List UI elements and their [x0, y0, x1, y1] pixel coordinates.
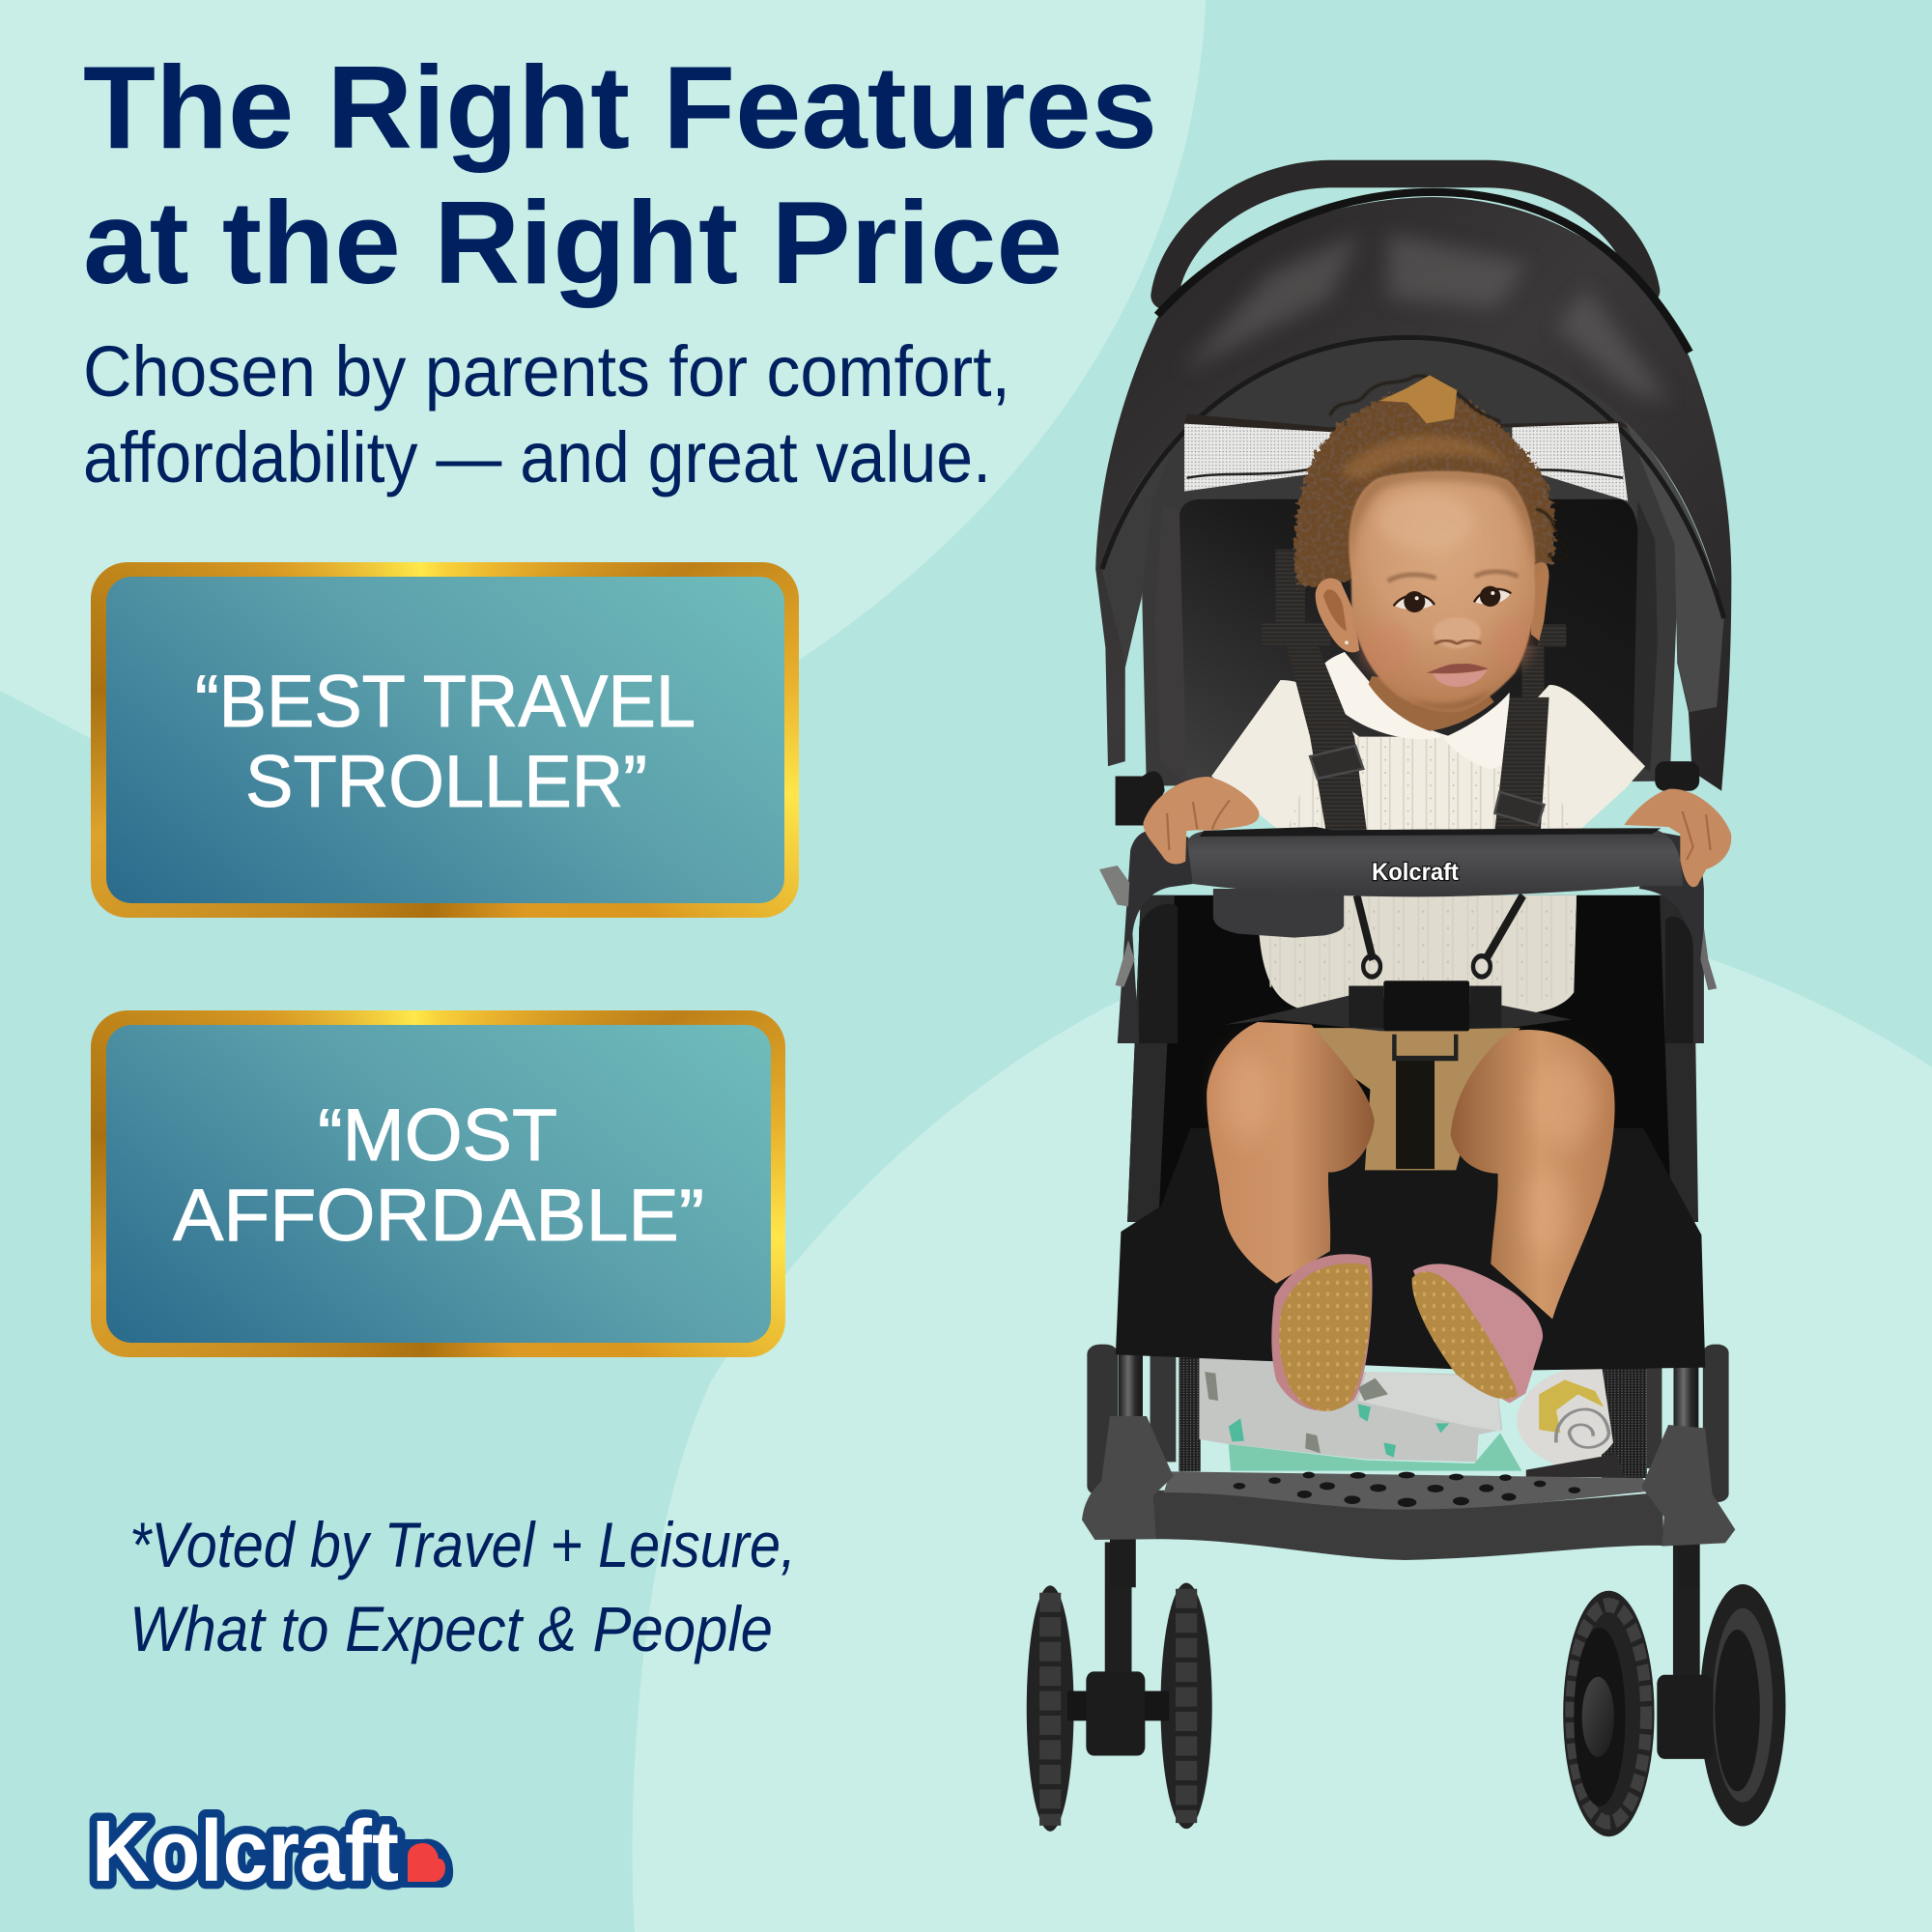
badge text: “MOST [318, 1094, 557, 1177]
frame arms [1118, 831, 1704, 1043]
inner ear left [1323, 589, 1347, 631]
earring [1345, 640, 1349, 644]
hair bow [1379, 375, 1457, 423]
right hinge [1655, 761, 1699, 791]
left shoe [1271, 1254, 1373, 1411]
footrest left cone [1082, 1416, 1174, 1540]
footrest deck [1164, 1471, 1653, 1510]
collar [1316, 652, 1510, 769]
footnote: What to Expect & People [129, 1593, 773, 1664]
eye left [1394, 591, 1435, 612]
background blob: bottom right [633, 928, 1932, 1932]
forehead highlight [1378, 493, 1475, 551]
basket mesh left [1179, 1352, 1201, 1471]
eye right [1474, 586, 1511, 607]
shorts [1285, 1028, 1520, 1170]
basket floor [1526, 1454, 1625, 1477]
shirt knit texture [1286, 737, 1574, 836]
left post [1119, 1354, 1143, 1422]
waist belt and buckle [1226, 980, 1572, 1059]
badge text [195, 661, 696, 823]
handlebar [1165, 174, 1646, 296]
leg highlights [1220, 1051, 1595, 1258]
upper harness straps [1262, 550, 1566, 699]
badge text: AFFORDABLE” [173, 1175, 704, 1257]
ear right [1531, 562, 1549, 640]
footrest right cone [1641, 1425, 1735, 1547]
side clip right [1700, 927, 1717, 990]
hand right [1624, 789, 1731, 887]
front right wheel pair [1563, 1542, 1785, 1836]
mouth [1427, 664, 1489, 687]
award box: most affordable [91, 1010, 785, 1357]
mesh creases [1187, 469, 1623, 478]
green blanket [1229, 1433, 1521, 1471]
hair [1294, 386, 1554, 586]
folded grey blanket [1199, 1354, 1502, 1462]
shirt [1211, 680, 1645, 836]
torso knit texture [1258, 895, 1577, 1015]
Kolcraft logo: Kolcraft [92, 1804, 399, 1900]
badge text: STROLLER” [245, 741, 647, 823]
seat side fabric right [1631, 500, 1658, 771]
canopy and seat back [1095, 174, 1731, 836]
basket frame [1151, 1350, 1662, 1468]
title: at the Right Price [83, 177, 1063, 308]
rear wheels [1087, 1345, 1729, 1502]
footrest front bar [1151, 1491, 1664, 1560]
rolled blanket [1517, 1365, 1613, 1466]
seat back pad [1179, 499, 1637, 779]
award box: best travel stroller [91, 562, 799, 918]
badge panel [106, 1025, 771, 1343]
baby head [1294, 375, 1567, 731]
chest clips [1357, 895, 1523, 977]
hairline shading [1347, 469, 1537, 573]
badge text [172, 1094, 704, 1257]
subtitle: Chosen by parents for comfort, [83, 331, 1010, 412]
left frame tube [1127, 895, 1175, 1222]
right shoe [1412, 1264, 1543, 1404]
neck [1369, 676, 1494, 731]
tray logo: Kolcraft [1372, 859, 1460, 886]
canopy dark bar above mesh [1184, 413, 1628, 432]
canopy rim lines [1102, 192, 1724, 618]
cheek blush [1359, 620, 1533, 676]
stroller wheels [1027, 1542, 1785, 1836]
side clip left [1099, 866, 1135, 987]
hand left [1144, 777, 1259, 864]
badge text: “BEST TRAVEL [195, 661, 696, 743]
canopy underside [1108, 323, 1719, 786]
tray and hands [1099, 777, 1731, 1043]
footrest dots [1234, 1472, 1580, 1507]
lower posts [1110, 1539, 1699, 1587]
footnote [129, 1509, 796, 1664]
mesh window left [1184, 424, 1335, 492]
basket mesh right [1602, 1362, 1647, 1478]
canopy outer shell [1095, 197, 1731, 791]
left leg [1207, 1022, 1375, 1284]
front left wheel pair [1027, 1542, 1212, 1832]
footnote: *Voted by Travel + Leisure, [129, 1509, 796, 1580]
subtitle: affordability — and great value. [83, 417, 991, 497]
chin shadow [1410, 689, 1491, 709]
subtitle [83, 331, 1010, 497]
background blob: top left [0, 0, 1206, 815]
canopy left under-rim [1102, 436, 1177, 663]
nose [1434, 617, 1481, 648]
tray body [1187, 828, 1683, 896]
right post [1673, 1365, 1698, 1428]
tray top rim [1200, 827, 1661, 837]
title [83, 42, 1157, 308]
badge panel [106, 577, 784, 903]
basket, blankets and footrest [1082, 1345, 1735, 1587]
crotch strap [1396, 1061, 1435, 1169]
mesh window right [1512, 423, 1628, 501]
baby torso [1258, 895, 1577, 1015]
face [1349, 471, 1535, 712]
cup holder [1213, 889, 1344, 938]
dark curls [1330, 376, 1567, 559]
frame behind seat [1127, 895, 1698, 1222]
right leg [1451, 1030, 1615, 1319]
canopy right under-rim [1626, 421, 1724, 712]
harness strap left [1285, 639, 1367, 831]
ear left [1316, 579, 1359, 652]
torso, shorts and legs [1116, 895, 1705, 1411]
canopy fabric highlights [1181, 234, 1670, 402]
stroller and baby photo [1027, 174, 1785, 1836]
dark seat cavity [1127, 895, 1697, 1222]
harness strap right [1494, 697, 1549, 831]
hair crown highlight [1340, 436, 1514, 480]
left hinge [1116, 771, 1165, 825]
eyebrows [1388, 572, 1519, 582]
foot panel [1116, 1128, 1705, 1371]
logo heart [408, 1843, 445, 1882]
title: The Right Features [83, 42, 1157, 173]
seat side fabric left [1154, 505, 1194, 783]
right frame tube [1660, 895, 1698, 1222]
